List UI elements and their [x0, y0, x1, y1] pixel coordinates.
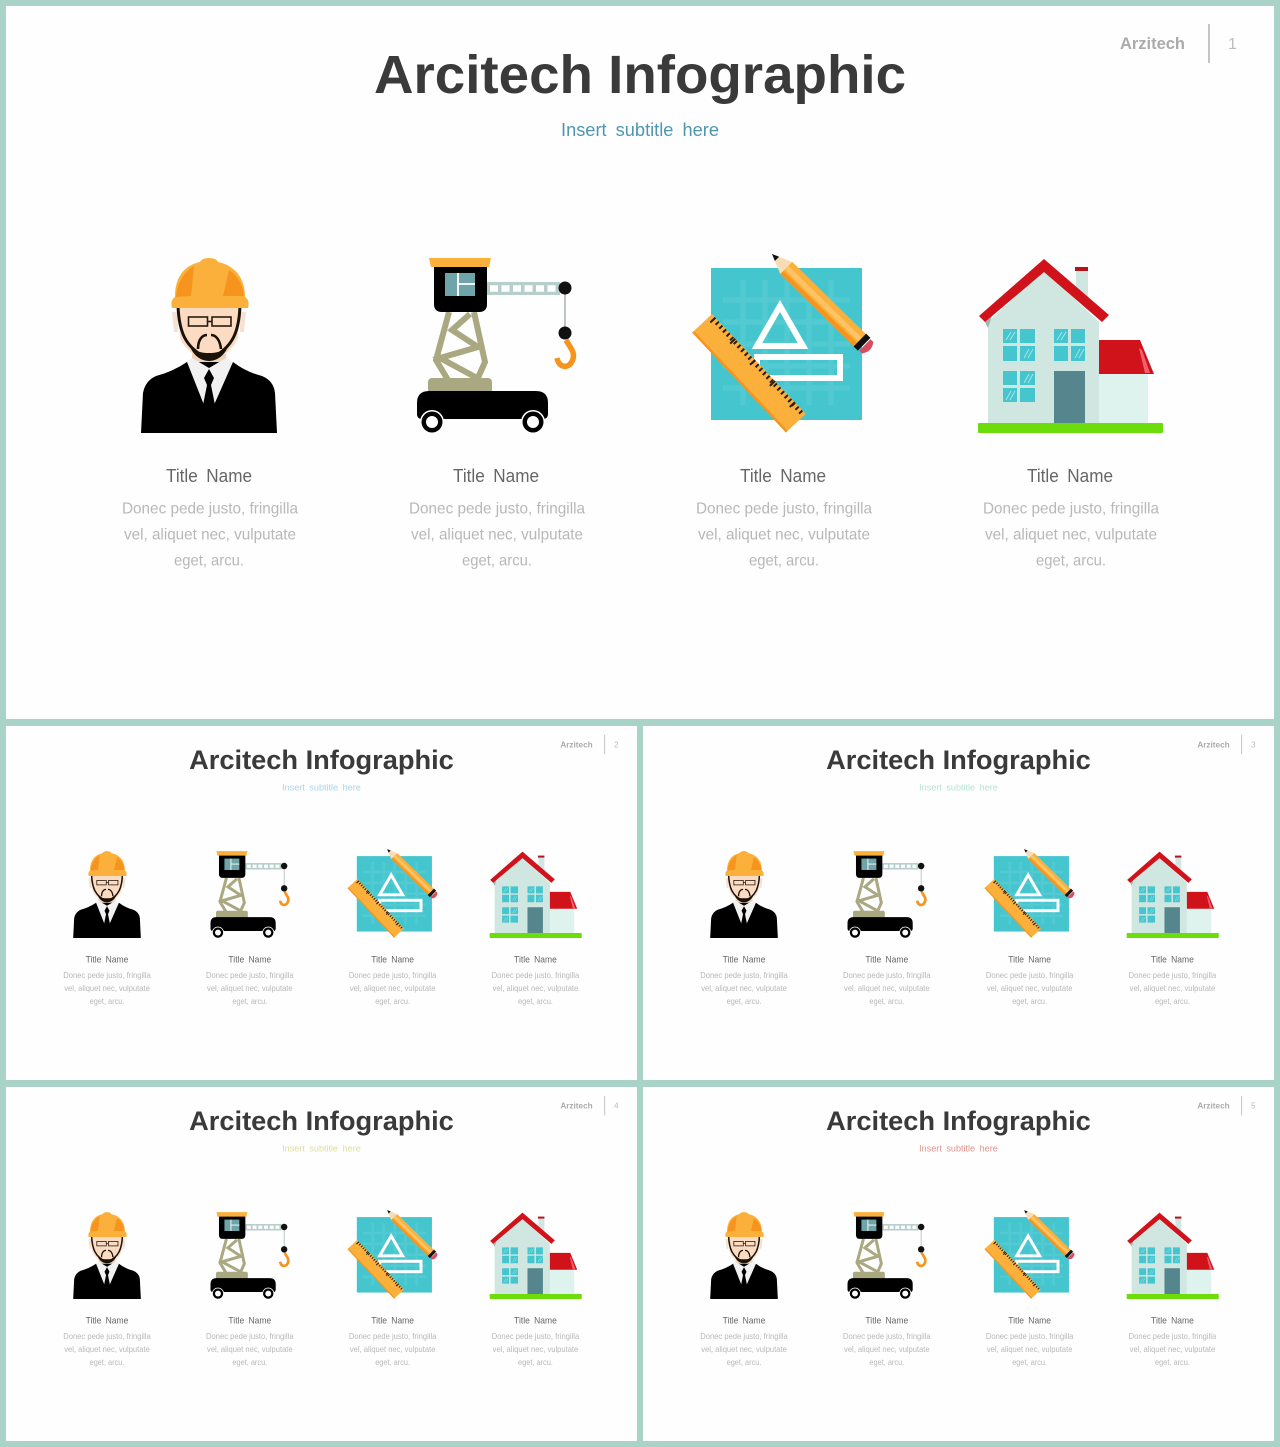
- column 1 text: vel, aliquet nec, vulputate: [64, 1345, 150, 1354]
- column 2 text: eget, arcu.: [232, 1358, 267, 1367]
- column 3 text: [986, 1315, 1074, 1367]
- column 1 text: Donec pede justo, fringilla: [63, 971, 151, 980]
- column 1 text: eget, arcu.: [727, 997, 761, 1006]
- column 3 text: eget, arcu.: [375, 1358, 410, 1367]
- column 4 text: Donec pede justo, fringilla: [983, 500, 1159, 518]
- column 3 text: Title Name: [1008, 1315, 1051, 1325]
- page number: 2: [614, 740, 619, 749]
- column 2 text: [409, 466, 585, 570]
- panel: slide 2: [6, 726, 637, 1080]
- column 2 text: [206, 1315, 294, 1367]
- brand label: Arzitech: [560, 740, 593, 749]
- icon: blueprint with ruler and pencil: [985, 1207, 1076, 1299]
- icon: house: [1127, 1213, 1219, 1299]
- panel: slide 3: [643, 726, 1274, 1080]
- column 3 text: eget, arcu.: [749, 552, 819, 570]
- column 1 text: vel, aliquet nec, vulputate: [701, 1345, 787, 1354]
- column 1 text: Donec pede justo, fringilla: [122, 500, 298, 518]
- subtitle: Insert subtitle here: [919, 1144, 998, 1154]
- column 4 text: vel, aliquet nec, vulputate: [985, 526, 1157, 544]
- icon: blueprint with ruler and pencil: [692, 248, 876, 432]
- column 1 text: vel, aliquet nec, vulputate: [64, 984, 150, 993]
- icon: crane: [848, 851, 925, 939]
- column 2 text: Title Name: [865, 1315, 908, 1325]
- title: Arcitech Infographic: [189, 745, 454, 775]
- column 3 text: vel, aliquet nec, vulputate: [987, 984, 1073, 993]
- icon: crane: [848, 1212, 925, 1300]
- column 1 text: eget, arcu.: [174, 552, 244, 570]
- column 1 text: Donec pede justo, fringilla: [63, 1332, 151, 1341]
- column 1 text: vel, aliquet nec, vulputate: [124, 526, 296, 544]
- column 2 text: vel, aliquet nec, vulputate: [411, 526, 583, 544]
- icon: blueprint with ruler and pencil: [348, 846, 439, 938]
- column 1 text: Donec pede justo, fringilla: [700, 1332, 788, 1341]
- icon: construction worker: [73, 851, 141, 938]
- column 1 text: Title Name: [86, 1315, 128, 1325]
- column 2 text: vel, aliquet nec, vulputate: [207, 1345, 293, 1354]
- column 1 text: vel, aliquet nec, vulputate: [701, 984, 787, 993]
- panel: slide 1: [6, 6, 1274, 719]
- column 2 text: Title Name: [453, 466, 539, 486]
- column 1 text: Title Name: [723, 954, 765, 964]
- brand label: Arzitech: [1197, 1101, 1230, 1110]
- title: Arcitech Infographic: [826, 1106, 1091, 1136]
- column 3 text: vel, aliquet nec, vulputate: [350, 1345, 436, 1354]
- column 4 text: Donec pede justo, fringilla: [1129, 1332, 1217, 1341]
- column 2 text: Title Name: [228, 954, 271, 964]
- column 2 text: eget, arcu.: [869, 997, 904, 1006]
- column 4 text: Donec pede justo, fringilla: [492, 1332, 580, 1341]
- column 4 text: Donec pede justo, fringilla: [492, 971, 580, 980]
- column 1 text: [63, 1315, 151, 1367]
- subtitle: Insert subtitle here: [282, 1144, 361, 1154]
- column 3 text: Title Name: [371, 954, 414, 964]
- icon: construction worker: [710, 851, 778, 938]
- column 2 text: [843, 954, 931, 1006]
- column 2 text: eget, arcu.: [869, 1358, 904, 1367]
- brand label: Arzitech: [560, 1101, 593, 1110]
- column 4 text: eget, arcu.: [1155, 1358, 1190, 1367]
- column 3 text: Title Name: [371, 1315, 414, 1325]
- column 4 text: Title Name: [1151, 1315, 1194, 1325]
- column 1 text: Title Name: [723, 1315, 765, 1325]
- column 2 text: vel, aliquet nec, vulputate: [207, 984, 293, 993]
- column 1 text: [700, 954, 788, 1006]
- column 1 text: eget, arcu.: [727, 1358, 761, 1367]
- column 4 text: vel, aliquet nec, vulputate: [493, 984, 579, 993]
- column 2 text: Title Name: [228, 1315, 271, 1325]
- title: Arcitech Infographic: [374, 45, 906, 105]
- column 1 text: Donec pede justo, fringilla: [700, 971, 788, 980]
- panel: slide 4: [6, 1087, 637, 1441]
- column 3 text: Donec pede justo, fringilla: [696, 500, 872, 518]
- icon: house: [490, 852, 582, 938]
- column 3 text: [696, 466, 872, 570]
- column 2 text: eget, arcu.: [462, 552, 532, 570]
- column 3 text: eget, arcu.: [375, 997, 410, 1006]
- column 4 text: [983, 466, 1159, 570]
- page number: 3: [1251, 740, 1256, 749]
- column 3 text: vel, aliquet nec, vulputate: [350, 984, 436, 993]
- icon: house: [490, 1213, 582, 1299]
- column 3 text: Donec pede justo, fringilla: [986, 1332, 1074, 1341]
- column 3 text: Title Name: [1008, 954, 1051, 964]
- icon: crane: [211, 1212, 288, 1300]
- icon: construction worker: [73, 1212, 141, 1299]
- subtitle: Insert subtitle here: [561, 120, 719, 140]
- column 4 text: Title Name: [1151, 954, 1194, 964]
- column 4 text: vel, aliquet nec, vulputate: [1130, 984, 1216, 993]
- column 2 text: Donec pede justo, fringilla: [843, 971, 931, 980]
- column 3 text: Donec pede justo, fringilla: [349, 971, 437, 980]
- column 3 text: Donec pede justo, fringilla: [986, 971, 1074, 980]
- icon: house: [978, 259, 1163, 433]
- column 1 text: eget, arcu.: [90, 997, 124, 1006]
- column 4 text: Title Name: [514, 1315, 557, 1325]
- column 3 text: eget, arcu.: [1012, 997, 1047, 1006]
- column 4 text: vel, aliquet nec, vulputate: [493, 1345, 579, 1354]
- page number: 5: [1251, 1101, 1256, 1110]
- page number: 4: [614, 1101, 619, 1110]
- column 4 text: Title Name: [1027, 466, 1113, 486]
- icon: crane: [211, 851, 288, 939]
- column 1 text: Title Name: [86, 954, 128, 964]
- column 2 text: vel, aliquet nec, vulputate: [844, 984, 930, 993]
- column 2 text: vel, aliquet nec, vulputate: [844, 1345, 930, 1354]
- column 3 text: [349, 954, 437, 1006]
- column 1 text: [700, 1315, 788, 1367]
- page number: 1: [1228, 36, 1237, 53]
- column 4 text: [492, 1315, 580, 1367]
- column 4 text: eget, arcu.: [1155, 997, 1190, 1006]
- column 4 text: Donec pede justo, fringilla: [1129, 971, 1217, 980]
- column 1 text: Title Name: [166, 466, 252, 486]
- column 4 text: vel, aliquet nec, vulputate: [1130, 1345, 1216, 1354]
- column 3 text: [349, 1315, 437, 1367]
- column 3 text: vel, aliquet nec, vulputate: [987, 1345, 1073, 1354]
- column 2 text: Donec pede justo, fringilla: [206, 971, 294, 980]
- column 2 text: Title Name: [865, 954, 908, 964]
- icon: construction worker: [141, 258, 277, 433]
- column 4 text: eget, arcu.: [518, 1358, 553, 1367]
- column 4 text: Title Name: [514, 954, 557, 964]
- column 3 text: Donec pede justo, fringilla: [349, 1332, 437, 1341]
- subtitle: Insert subtitle here: [919, 783, 998, 793]
- icon: blueprint with ruler and pencil: [348, 1207, 439, 1299]
- title: Arcitech Infographic: [189, 1106, 454, 1136]
- column 2 text: Donec pede justo, fringilla: [843, 1332, 931, 1341]
- column 2 text: [206, 954, 294, 1006]
- column 2 text: eget, arcu.: [232, 997, 267, 1006]
- icon: construction worker: [710, 1212, 778, 1299]
- column 3 text: [986, 954, 1074, 1006]
- column 1 text: [63, 954, 151, 1006]
- column 4 text: [1129, 954, 1217, 1006]
- column 4 text: eget, arcu.: [518, 997, 553, 1006]
- column 4 text: eget, arcu.: [1036, 552, 1106, 570]
- icon: blueprint with ruler and pencil: [985, 846, 1076, 938]
- column 3 text: Title Name: [740, 466, 826, 486]
- column 1 text: [122, 466, 298, 570]
- subtitle: Insert subtitle here: [282, 783, 361, 793]
- column 4 text: [492, 954, 580, 1006]
- brand label: Arzitech: [1120, 35, 1185, 53]
- title: Arcitech Infographic: [826, 745, 1091, 775]
- column 2 text: [843, 1315, 931, 1367]
- icon: house: [1127, 852, 1219, 938]
- icon: crane: [417, 258, 574, 434]
- column 1 text: eget, arcu.: [90, 1358, 124, 1367]
- column 2 text: Donec pede justo, fringilla: [409, 500, 585, 518]
- column 3 text: eget, arcu.: [1012, 1358, 1047, 1367]
- brand label: Arzitech: [1197, 740, 1230, 749]
- column 3 text: vel, aliquet nec, vulputate: [698, 526, 870, 544]
- panel: slide 5: [643, 1087, 1274, 1441]
- column 4 text: [1129, 1315, 1217, 1367]
- column 2 text: Donec pede justo, fringilla: [206, 1332, 294, 1341]
